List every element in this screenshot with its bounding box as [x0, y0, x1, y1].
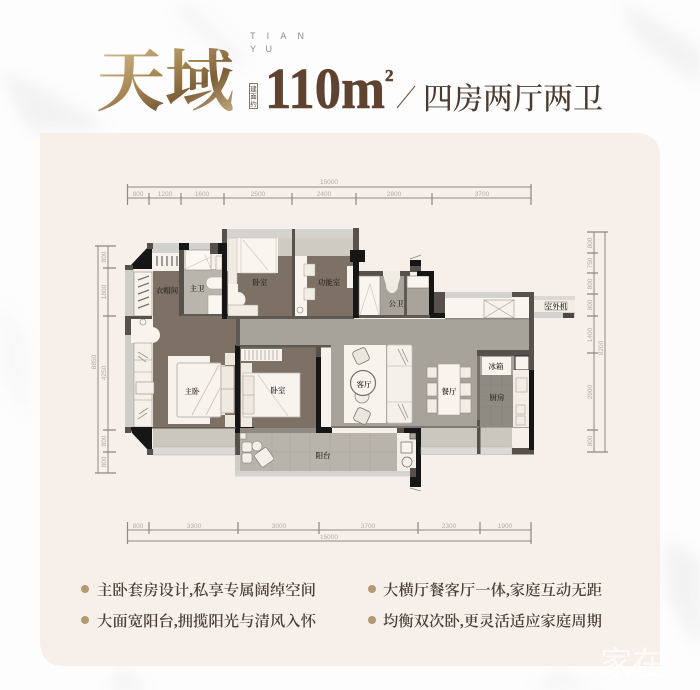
balcony cabinet — [397, 433, 416, 470]
room: master bedroom: 主卧 — [184, 386, 200, 396]
room: study — [292, 229, 355, 316]
tag: 建面约 — [250, 84, 258, 108]
room: living — [344, 345, 412, 425]
area: 110m²: 110m — [265, 56, 385, 121]
floor: living and hall — [240, 319, 529, 428]
room: second bedroom — [240, 345, 332, 433]
room: master bath: 主卫 — [190, 283, 205, 293]
room: living: 客厅 — [356, 380, 372, 389]
left dimensions: 4250 — [101, 365, 108, 380]
kitchen terrace strip — [331, 420, 534, 454]
floor plan — [125, 228, 575, 491]
walls: north west — [125, 229, 240, 319]
walls: spine — [235, 316, 254, 455]
pinyin: TIAN YU: TIAN — [250, 31, 304, 41]
pinyin: TIAN YU — [250, 31, 304, 54]
top dimensions: 2800 — [387, 191, 402, 198]
top dimensions: 2500 — [251, 191, 266, 198]
left dimensions: 1800 — [101, 284, 108, 299]
right dimensions: 800 — [587, 299, 594, 310]
room: kitchen: 厨房 — [490, 392, 505, 402]
room: kitchen: 冰箱 — [488, 361, 504, 371]
point 3: 大面宽阳台,拥揽阳光与清风入怀 — [97, 612, 317, 630]
room: study: 功能室 — [318, 277, 341, 287]
room: master bedroom — [168, 353, 235, 427]
top dimensions: 1200 — [158, 191, 173, 198]
tag: 建面约: 约 — [250, 99, 257, 108]
selling points — [81, 581, 602, 630]
room: dining — [427, 364, 471, 415]
bottom dimensions: 2300 — [442, 523, 457, 530]
slash — [397, 86, 415, 108]
pinyin: TIAN YU: YU — [250, 44, 272, 54]
layout: 四房两厅两卫: 四房两厅两卫 — [423, 83, 603, 116]
outdoor AC unit: 室外机 — [545, 301, 568, 311]
room: master bath — [182, 243, 223, 316]
room: second bath — [359, 255, 445, 318]
room: kitchen — [477, 350, 534, 450]
bottom dimensions: 15000 — [320, 534, 338, 541]
right dimensions: 1400 — [587, 327, 594, 342]
watermark: 深圳 — [668, 654, 688, 666]
top dimensions: 3700 — [475, 191, 490, 198]
right dimensions: 2900 — [587, 384, 594, 399]
bottom dimensions: 1900 — [498, 523, 513, 530]
area: 110m²: 2 — [385, 66, 394, 85]
room: north bedroom — [227, 229, 292, 316]
top dimensions: 800 — [133, 191, 144, 198]
right dimensions — [587, 232, 608, 452]
right dimensions: 800 — [587, 278, 594, 289]
watermark — [600, 645, 694, 689]
room: second bedroom: 卧室 — [270, 385, 286, 395]
tag: 建面约: 面 — [250, 92, 257, 100]
left dimensions: 800 — [101, 251, 108, 262]
left dimensions — [91, 246, 116, 473]
top dimensions: 15000 — [320, 179, 338, 186]
watermark: bbs.szhome.com — [600, 680, 692, 689]
room: north bedroom: 卧室 — [252, 277, 268, 287]
balcony — [235, 427, 421, 491]
right dimensions: 750 — [587, 257, 594, 268]
balcony: 阳台 — [316, 450, 331, 460]
tag: 建面约: 建 — [250, 84, 257, 93]
right dimensions: 800 — [587, 435, 594, 446]
balcony furniture — [240, 433, 275, 468]
outdoor AC unit — [534, 296, 575, 318]
closet: top wardrobe — [152, 243, 184, 316]
point 4: 均衡双次卧,更灵活适应家庭周期 — [383, 612, 602, 630]
point 1: 主卧套房设计,私享专属阔绰空间 — [97, 581, 316, 599]
title — [96, 31, 603, 121]
bottom dimensions: 3000 — [272, 523, 287, 530]
point 2: 大横厅餐客厅一体,家庭互动无距 — [383, 581, 602, 599]
walls: centre north — [350, 228, 365, 318]
title: 天域: 天域 — [96, 44, 234, 120]
wardrobe: master bedroom — [125, 265, 160, 428]
right dimensions: 800 — [587, 237, 594, 248]
room: dining: 餐厅 — [442, 386, 457, 396]
room: second bath: 公卫 — [388, 299, 404, 308]
floor: master bedroom and closet — [153, 271, 236, 428]
bottom dimensions — [127, 522, 531, 544]
watermark: 家在 — [600, 645, 664, 681]
left dimensions: 800 — [101, 456, 108, 467]
left dimensions: 8850 — [91, 354, 98, 369]
bottom dimensions: 3300 — [187, 523, 202, 530]
master bedroom terrace — [125, 427, 236, 455]
closet: top wardrobe: 衣帽间 — [156, 285, 179, 295]
top dimensions: 2400 — [317, 191, 332, 198]
bottom dimensions: 3700 — [361, 523, 376, 530]
top dimensions — [127, 179, 531, 205]
left dimensions: 800 — [101, 435, 108, 446]
room: utility — [445, 292, 534, 350]
top dimensions: 1600 — [195, 191, 210, 198]
panel — [40, 133, 660, 666]
right dimensions: 8200 — [598, 340, 605, 355]
bottom dimensions: 800 — [133, 523, 144, 530]
